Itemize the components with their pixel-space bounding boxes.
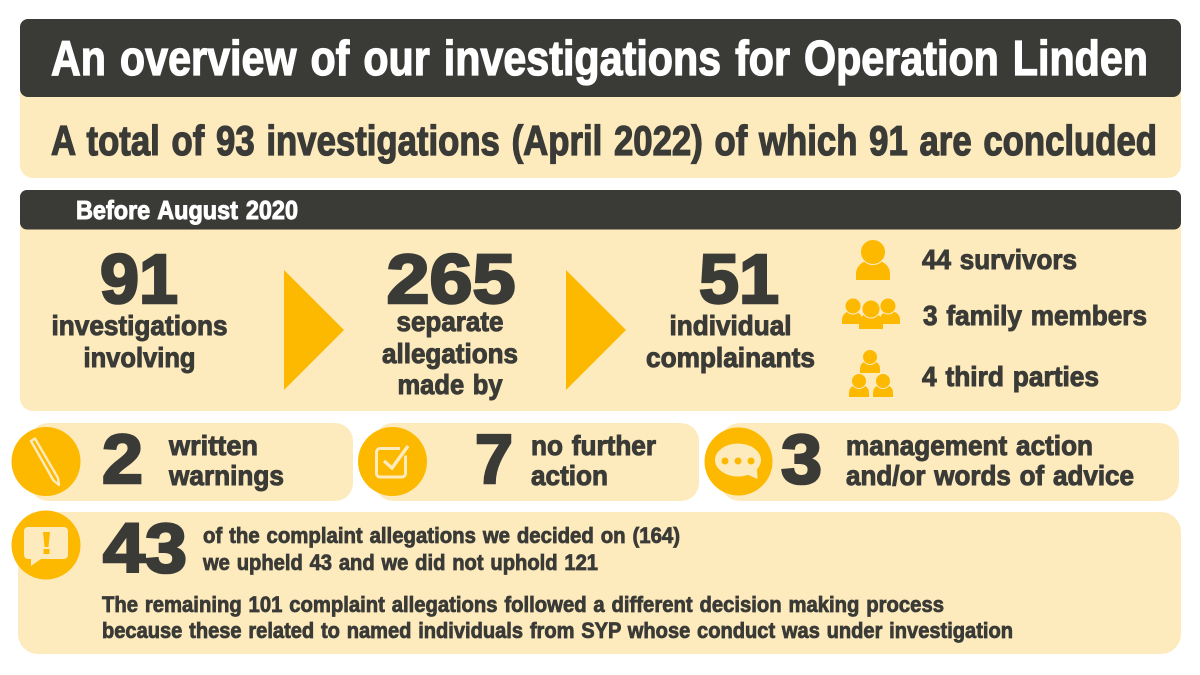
icon: alert speech bubble xyxy=(12,510,80,580)
remaining text: because these related to named individuals from SYP whose conduct was under investigation xyxy=(102,618,1013,643)
label: written xyxy=(168,430,258,461)
stat: 51 complainants: 51 xyxy=(699,240,779,318)
stat: 265 allegations: made by xyxy=(398,369,503,400)
panel: no further action xyxy=(358,420,699,501)
icon: single person xyxy=(856,240,890,280)
stat: 91 investigations xyxy=(52,240,228,373)
remaining text: The remaining 101 complaint allegations followed a different decision making process xyxy=(102,592,944,617)
label: survivors: 44 survivors xyxy=(922,244,1077,275)
panel: written warnings xyxy=(12,420,353,501)
arrow xyxy=(284,270,344,390)
label: action xyxy=(531,460,608,491)
label: no further xyxy=(531,430,656,461)
icon: third parties xyxy=(849,350,893,397)
decided text: we upheld 43 and we did not uphold 121 xyxy=(202,550,598,575)
stat: 51 complainants xyxy=(646,240,815,373)
label: warnings xyxy=(168,460,284,491)
stat: 51 complainants: complainants xyxy=(646,342,815,373)
panel: before August 2020 xyxy=(20,190,1181,411)
stat: 91 investigations: involving xyxy=(84,342,196,373)
icon: checkbox xyxy=(358,427,427,496)
section heading: Before August 2020 xyxy=(76,195,298,225)
label: third parties: 4 third parties xyxy=(922,361,1099,392)
stat: 51 complainants: individual xyxy=(670,310,792,341)
decided text: of the complaint allegations we decided on (164) xyxy=(203,523,680,548)
panel: summary total xyxy=(20,60,1181,178)
number 7: 7 xyxy=(475,420,513,498)
stat: 265 allegations: 265 xyxy=(386,240,516,318)
icon: family group xyxy=(842,298,900,329)
stat: 265 allegations: separate xyxy=(396,306,504,337)
stat: 265 allegations: allegations xyxy=(382,338,518,369)
icon: speech bubble xyxy=(704,428,772,496)
title banner xyxy=(20,19,1181,97)
label xyxy=(531,430,656,491)
label: family members: 3 family members xyxy=(923,300,1147,331)
arrow xyxy=(566,270,626,390)
remaining text xyxy=(102,592,1013,643)
number 43: 43 xyxy=(103,509,187,587)
panel: management action xyxy=(704,420,1179,501)
label: and/or words of advice xyxy=(846,460,1134,491)
number 3: 3 xyxy=(781,420,822,498)
panel: complaint allegations xyxy=(12,509,1181,654)
stat: 91 investigations: 91 xyxy=(100,240,178,318)
label: management action xyxy=(846,430,1093,461)
icon: pencil xyxy=(12,427,80,496)
decided text xyxy=(202,523,680,575)
stat: 265 allegations xyxy=(382,240,518,400)
number 2: 2 xyxy=(102,420,143,498)
stat: 91 investigations: investigations xyxy=(52,310,228,341)
label xyxy=(846,430,1134,491)
label xyxy=(168,430,284,491)
